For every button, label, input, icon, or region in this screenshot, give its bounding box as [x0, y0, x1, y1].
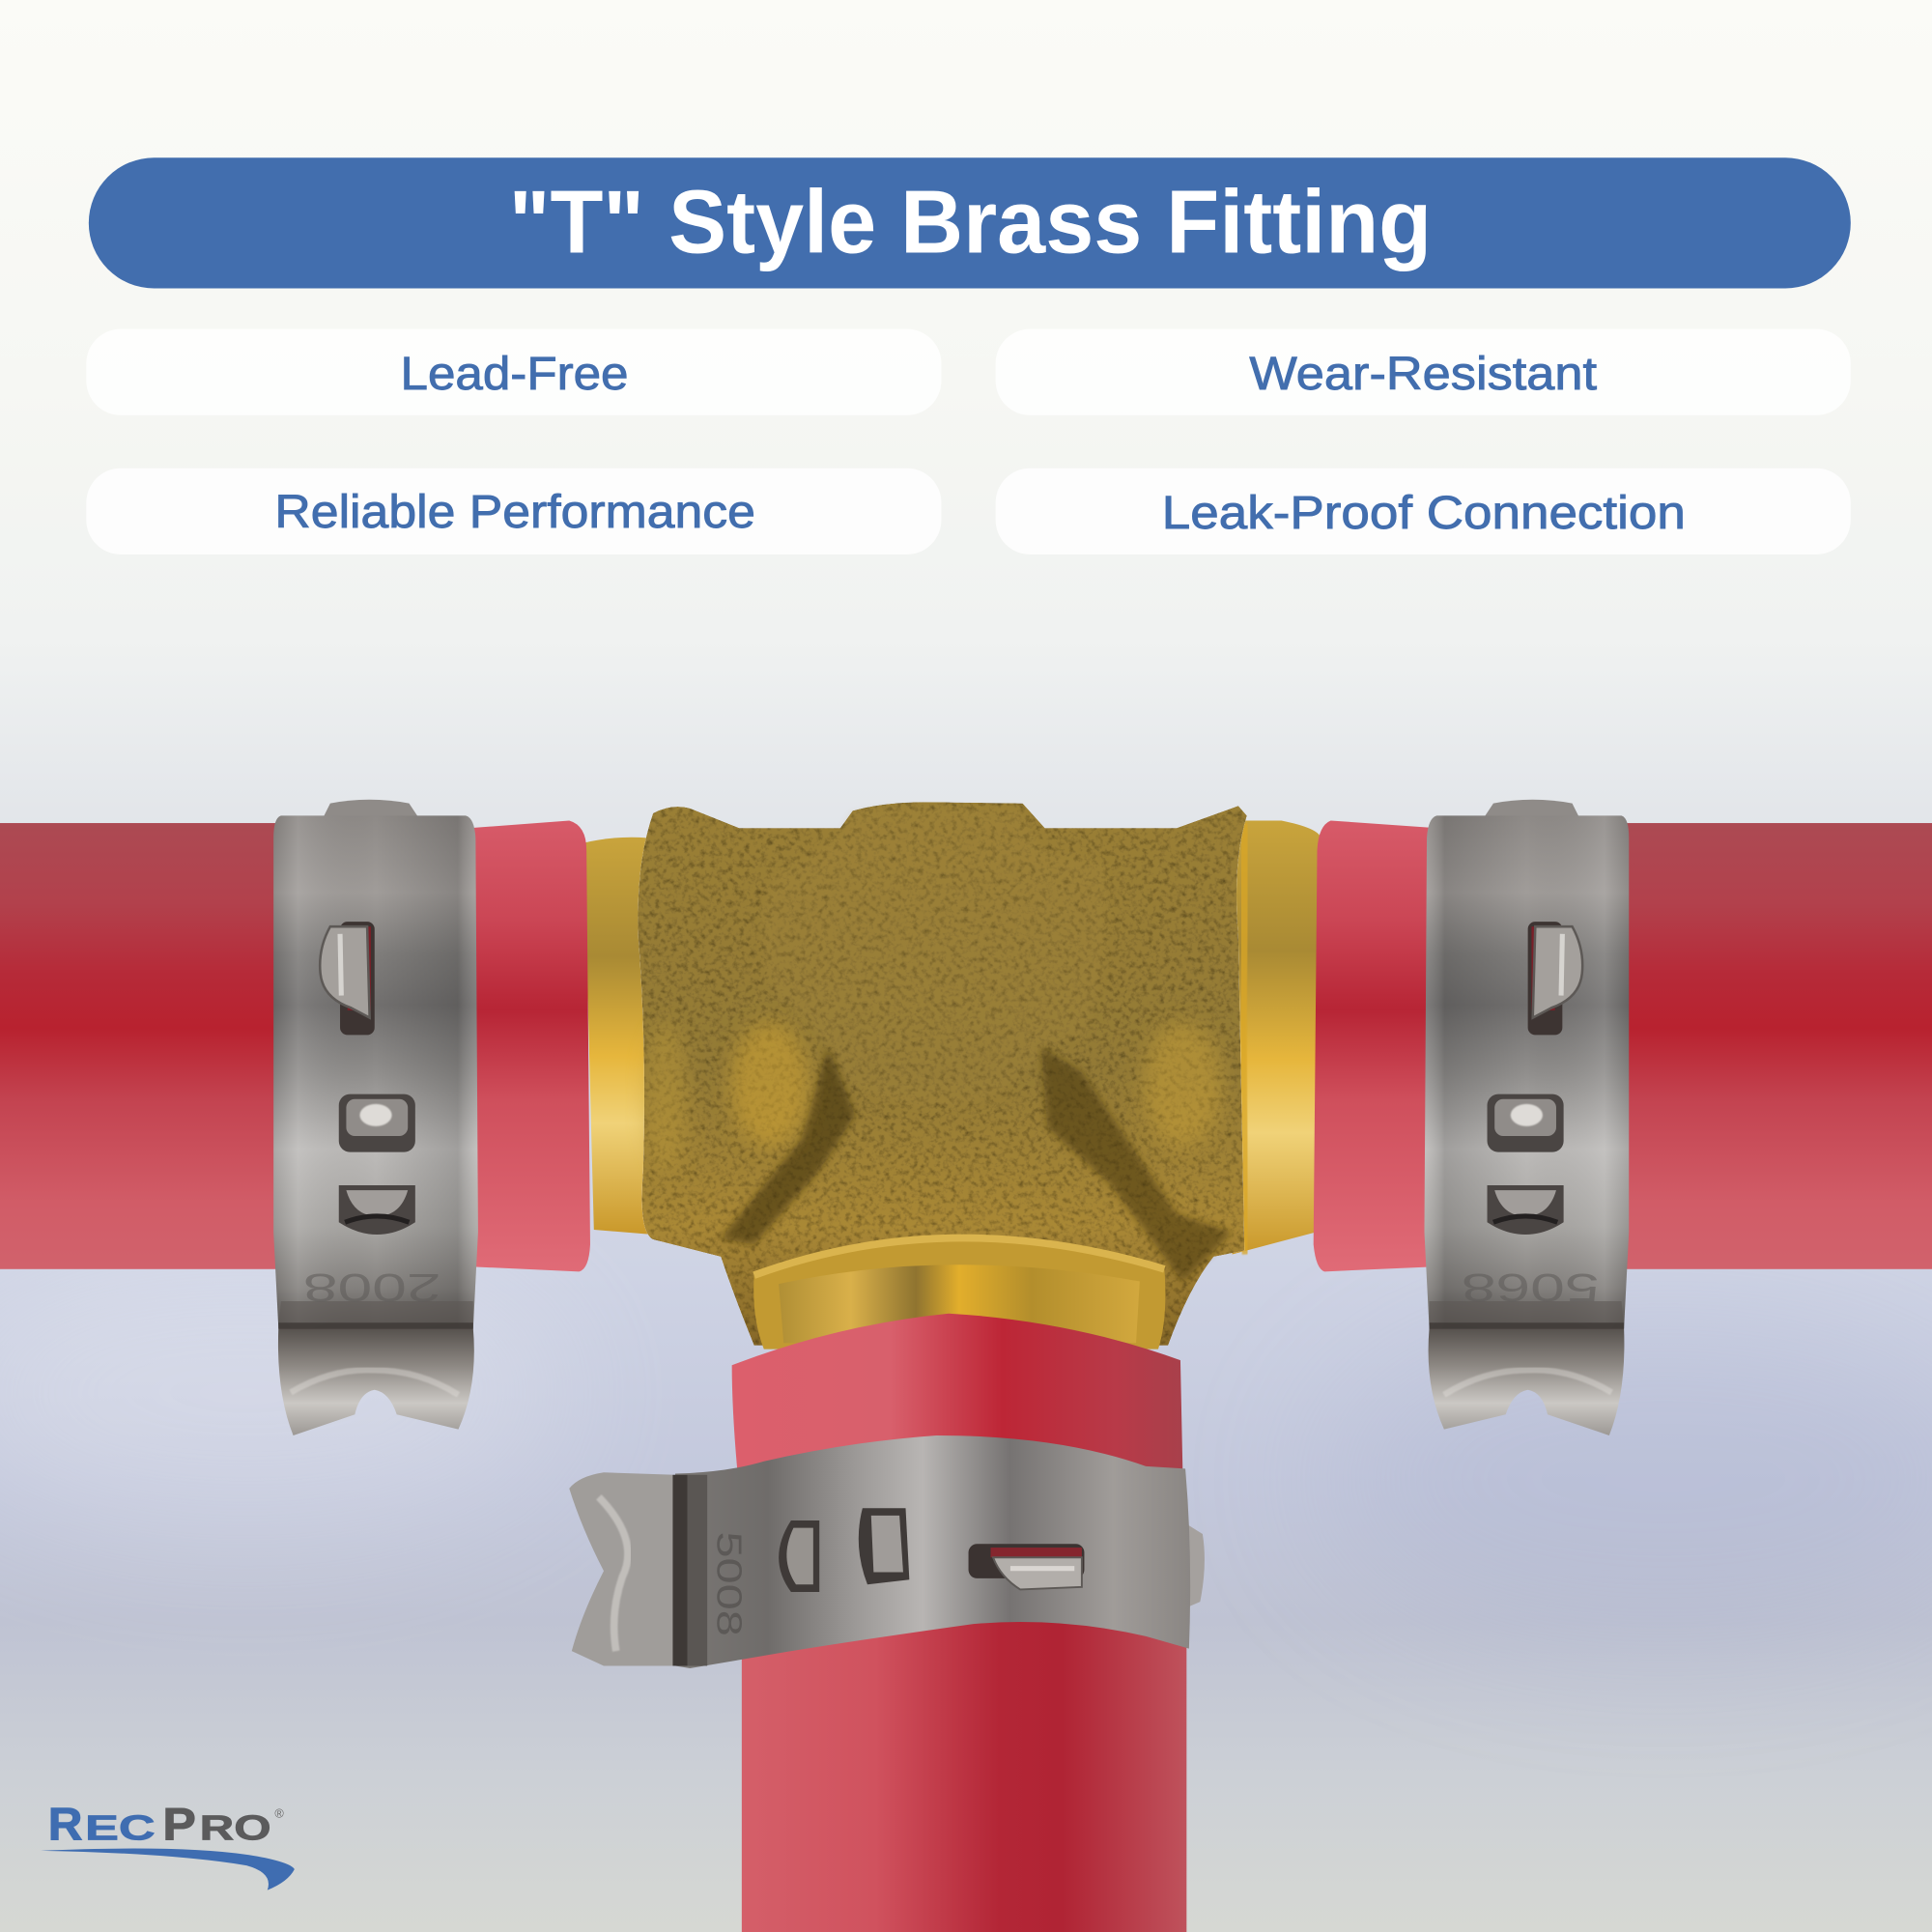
right gold sleeve [1233, 820, 1321, 1254]
feature pill: Reliable Performance [86, 469, 941, 554]
feature pill: Leak-Proof Connection: Leak-Proof Connection [1162, 487, 1686, 539]
bottom PEX pipe [732, 1314, 1186, 1932]
clamp bump two [859, 1508, 909, 1584]
cast brass body [638, 802, 1247, 1346]
RecPro logo [41, 1799, 295, 1890]
logo wordmark: P [162, 1799, 196, 1850]
right crimp clamp [1424, 800, 1629, 1435]
logo swoosh [41, 1849, 295, 1890]
title text: "T" Style Brass Fitting [509, 171, 1432, 271]
right pipe end [1314, 820, 1435, 1271]
clamp bump one [779, 1520, 819, 1592]
logo wordmark [48, 1799, 284, 1850]
right PEX pipe [1314, 820, 1932, 1271]
title banner [89, 157, 1851, 288]
bottom crimp clamp [569, 1435, 1205, 1668]
left crimp clamp [273, 800, 478, 1435]
right clamp stamp: 5068 [1462, 1265, 1600, 1310]
feature pill: Lead-Free: Lead-Free [401, 348, 629, 400]
clamp slot and tab [969, 1544, 1084, 1589]
logo wordmark: EC [85, 1808, 156, 1847]
logo wordmark: R [48, 1799, 82, 1850]
left clamp stamp: 2008 [303, 1265, 441, 1310]
feature pill: Reliable Performance: Reliable Performance [274, 486, 755, 538]
casting creases and highlights [721, 1047, 855, 1244]
left PEX pipe [0, 820, 590, 1271]
feature pill: Leak-Proof Connection [996, 469, 1851, 554]
bottom clamp stamp: 5008 [709, 1531, 748, 1636]
logo wordmark: ® [274, 1805, 284, 1820]
feature pill: Wear-Resistant [996, 329, 1851, 415]
left pipe end [470, 820, 590, 1271]
brass T fitting [584, 802, 1321, 1350]
logo wordmark: RO [200, 1808, 271, 1847]
bottom gold collar [753, 1236, 1165, 1350]
raised cross casting [762, 807, 1107, 1108]
bottom pipe end [732, 1314, 1182, 1491]
feature pill: Wear-Resistant: Wear-Resistant [1249, 348, 1598, 400]
feature pill: Lead-Free [86, 329, 941, 415]
left gold sleeve [584, 838, 653, 1235]
